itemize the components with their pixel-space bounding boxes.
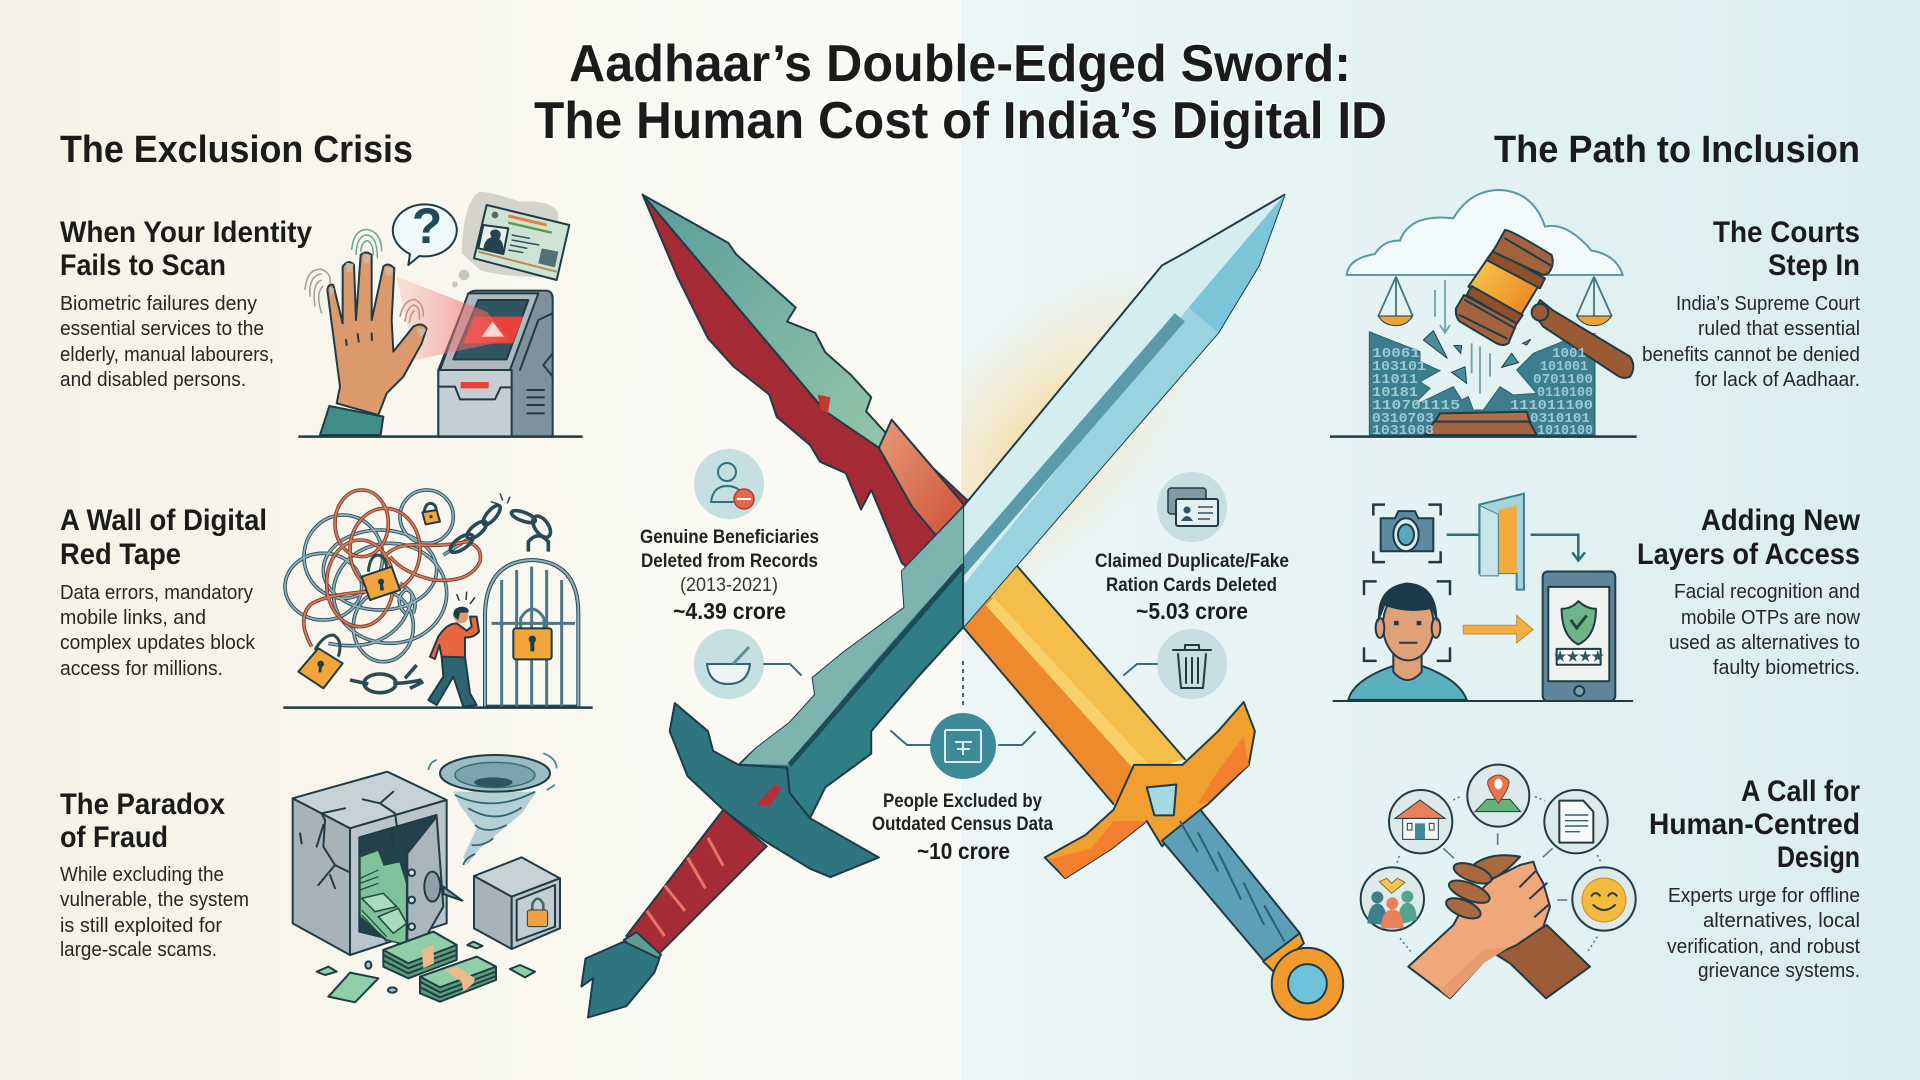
text block: a wall of digital red tape: complex updates block (60, 631, 256, 654)
text block: a wall of digital red tape: Data errors, mandatory (60, 581, 254, 604)
icon: empty bowl and spoon (694, 629, 801, 699)
binary digits: 110701115 (1372, 398, 1460, 414)
text block: a wall of digital red tape: mobile links, and (60, 606, 206, 629)
icon: scales (1378, 277, 1612, 326)
text block: when your identity fails to scan: and disabled persons. (60, 368, 246, 391)
icon: frustrated person (428, 592, 479, 707)
icon: camera (1373, 505, 1441, 562)
icon: duplicate id cards (1157, 472, 1227, 542)
binary digits: 0310101 (1530, 411, 1590, 427)
icon: id card (452, 192, 569, 287)
password stars: ★★★★ (1554, 648, 1605, 664)
binary digits: 0110100 (1537, 385, 1593, 401)
stat: claimed duplicate ration cards deleted: Ration Cards Deleted (1106, 575, 1277, 596)
stat: claimed duplicate ration cards deleted: ~5.03 crore (1136, 598, 1248, 624)
stat: people excluded by outdated census data: Outdated Census Data (872, 814, 1053, 835)
icon: locked gate (485, 560, 578, 707)
stat: people excluded by outdated census data (872, 661, 1053, 864)
stat: genuine beneficiaries deleted (640, 449, 819, 699)
text block: the courts step in: ruled that essential (1698, 317, 1860, 340)
illustration: broken safe, tornado and money (293, 753, 560, 1002)
text block: a wall of digital red tape (60, 504, 267, 680)
title: Aadhaar’s Double-Edged Sword: (569, 35, 1351, 93)
sword: damaged and orange blade running top-left to bottom-right (643, 195, 1343, 1020)
text block: adding new layers of access: Layers of Access (1637, 538, 1860, 571)
stat: genuine beneficiaries deleted: (2013-2021) (680, 575, 778, 596)
binary digits: 0310703 (1372, 411, 1434, 427)
icon: document circle (1544, 790, 1608, 853)
icon: money stacks (317, 932, 535, 1002)
icon: red scan beam (397, 277, 510, 360)
dotted connector lines (1397, 797, 1601, 953)
icon: shards and falling lines (1423, 280, 1531, 393)
stat: claimed duplicate ration cards deleted (1095, 472, 1289, 699)
illustration: tangled red tape and locked gate (283, 490, 593, 708)
icon: tornado (428, 753, 557, 865)
text block: when your identity fails to scan: When Your Identity (60, 216, 312, 249)
text block: when your identity fails to scan (60, 216, 312, 391)
text block: a call for human-centred design: Experts urge for offline (1668, 884, 1860, 907)
icon: broken chains (350, 493, 554, 693)
text block: adding new layers of access (1637, 504, 1861, 679)
arrow: door to phone (1531, 535, 1585, 561)
title (534, 35, 1387, 150)
binary digits: 0701100 (1533, 372, 1593, 388)
icon: cloud (1347, 190, 1623, 275)
text block: the courts step in: India’s Supreme Court (1676, 292, 1860, 315)
text block: the courts step in: Step In (1768, 249, 1860, 282)
text block: the courts step in: The Courts (1713, 216, 1860, 249)
text block: a call for human-centred design: grievance systems. (1698, 959, 1860, 982)
binary digits: 1031008 (1372, 423, 1434, 439)
illustration: gavel breaking the digital wall (1330, 190, 1637, 439)
icon: padlocks (298, 503, 440, 688)
binary digits: 10181 (1372, 385, 1418, 401)
heading: the exclusion crisis: The Exclusion Crisis (60, 129, 413, 171)
text block: a wall of digital red tape: access for millions. (60, 657, 223, 680)
icon: cracked binary wall (1369, 332, 1595, 435)
stat: genuine beneficiaries deleted: Genuine Beneficiaries (640, 527, 819, 548)
icon: trash can (1124, 629, 1227, 699)
binary digits: 111011100 (1510, 398, 1593, 414)
text block: adding new layers of access: Adding New (1701, 504, 1861, 537)
text block: the paradox of fraud: large-scale scams. (60, 938, 217, 961)
text block: adding new layers of access: mobile OTPs are now (1681, 606, 1860, 629)
icon: census document (891, 661, 1035, 779)
background glow behind the bright sword (961, 288, 1178, 572)
text block: the paradox of fraud: of Fraud (60, 821, 168, 854)
icon: face scan (1348, 581, 1467, 700)
stat: people excluded by outdated census data: ~10 crore (917, 838, 1010, 864)
illustration: clasped hands and community icons (1361, 765, 1636, 998)
text block: a wall of digital red tape: A Wall of Digital (60, 504, 267, 537)
stat: claimed duplicate ration cards deleted: Claimed Duplicate/Fake (1095, 551, 1289, 572)
text block: a wall of digital red tape: Red Tape (60, 538, 181, 571)
floor line (283, 706, 593, 709)
illustration: biometric failure at kiosk (298, 192, 583, 437)
text block: a call for human-centred design: verification, and robust (1667, 935, 1860, 958)
text block: adding new layers of access: used as alternatives to (1669, 631, 1860, 654)
text block: when your identity fails to scan: Biometric failures deny (60, 292, 258, 315)
text block: a call for human-centred design: A Call for (1741, 775, 1860, 808)
sword: blue and teal blade running top-right to bottom-left (581, 195, 1284, 1017)
text block: the paradox of fraud: vulnerable, the system (60, 888, 249, 911)
icon: question speech bubble (393, 204, 457, 265)
heading: the path to inclusion: The Path to Inclusion (1494, 129, 1860, 171)
text block: the paradox of fraud: The Paradox (60, 788, 225, 821)
stat: genuine beneficiaries deleted: Deleted from Records (641, 551, 818, 572)
illustration: biometric failure at kiosk: ? (412, 198, 442, 254)
text block: adding new layers of access: Facial recognition and (1674, 580, 1860, 603)
arrow: camera to door (1447, 528, 1488, 541)
arrow: face to phone (1463, 615, 1533, 643)
background: inclusion side (961, 0, 1920, 1080)
icon: smiley circle (1572, 867, 1636, 931)
binary digits (1372, 346, 1593, 439)
illustration: new access layers (1333, 494, 1632, 701)
icon: small locked safe (474, 857, 560, 949)
icon: community circle (1361, 867, 1424, 931)
icon: cracked safe (293, 772, 462, 955)
icon: person with blocked badge (694, 449, 764, 519)
text block: the courts step in: benefits cannot be denied (1642, 343, 1860, 366)
text block: a call for human-centred design: Human-Centred (1649, 808, 1860, 841)
icon: fingerprints (305, 229, 423, 323)
floor line (1330, 435, 1637, 438)
background: exclusion side (0, 0, 961, 1080)
binary digits: 10061 (1372, 346, 1420, 362)
text block: a call for human-centred design (1649, 775, 1860, 982)
text block: when your identity fails to scan: essential services to the (60, 317, 264, 340)
stat: genuine beneficiaries deleted: ~4.39 crore (673, 598, 786, 624)
icon: kiosk (438, 291, 553, 437)
icon: gavel base (1425, 412, 1537, 435)
title: The Human Cost of India’s Digital ID (534, 92, 1387, 150)
text block: a call for human-centred design: alternatives, local (1703, 909, 1860, 932)
icon: location circle (1467, 765, 1529, 827)
binary digits: 1010100 (1537, 423, 1593, 439)
text block: the paradox of fraud (60, 788, 249, 961)
floor line (1333, 700, 1632, 702)
text block: the paradox of fraud: is still exploited for (60, 914, 222, 937)
icon: gavel (1456, 230, 1633, 378)
stat: people excluded by outdated census data: People Excluded by (883, 791, 1042, 812)
text block: the courts step in: for lack of Aadhaar. (1695, 368, 1860, 391)
text block: the courts step in (1642, 216, 1860, 391)
icon: door (1479, 494, 1524, 590)
icon: hand (320, 252, 427, 435)
binary digits: 11011 (1372, 372, 1418, 388)
icon: phone with shield (1543, 572, 1615, 701)
binary digits: 1001 (1552, 346, 1586, 362)
icon: house circle (1389, 790, 1452, 853)
crossed swords illustration (581, 195, 1343, 1020)
icon: tangled wires (285, 490, 481, 662)
text block: when your identity fails to scan: elderly, manual labourers, (60, 343, 274, 366)
icon: clasped hands (1408, 855, 1590, 998)
text block: when your identity fails to scan: Fails to Scan (60, 249, 226, 282)
text block: a call for human-centred design: Design (1777, 841, 1860, 874)
binary digits: 103101 (1372, 359, 1426, 375)
binary digits: 101001 (1540, 359, 1588, 375)
text block: the paradox of fraud: While excluding the (60, 863, 224, 886)
floor line (298, 435, 583, 438)
text block: adding new layers of access: faulty biometrics. (1713, 656, 1860, 679)
connector lines (1443, 833, 1567, 900)
